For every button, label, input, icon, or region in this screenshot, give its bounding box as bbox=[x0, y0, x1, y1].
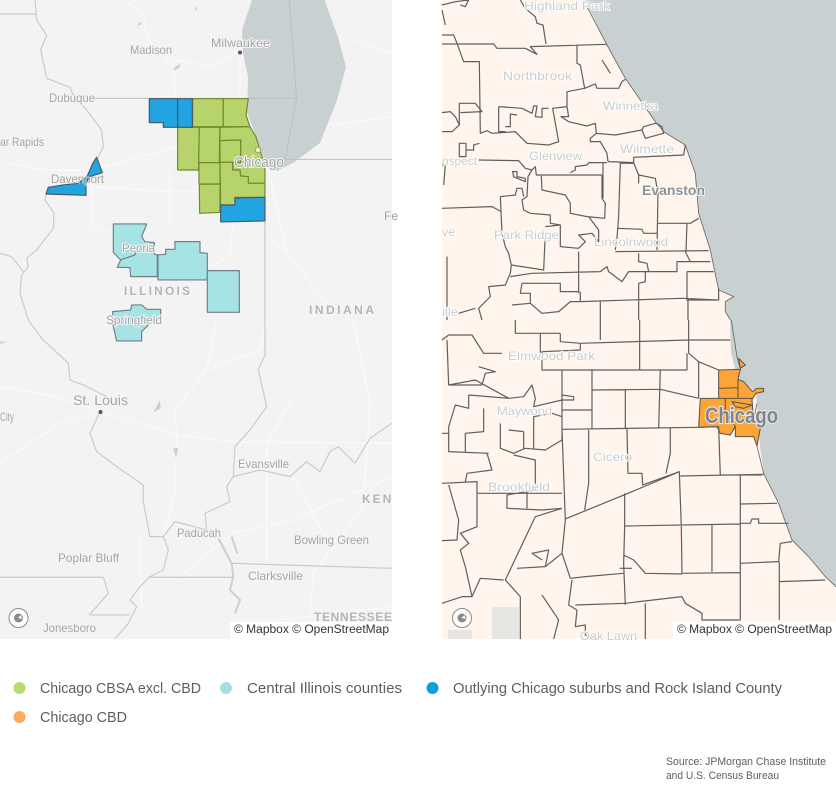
map labels: city: Northbrook bbox=[503, 69, 573, 83]
counties: outlying Chicago suburbs and Rock Island (blue) bbox=[46, 99, 265, 222]
map labels: regional: Peoria bbox=[122, 241, 155, 255]
attribution bbox=[230, 622, 392, 639]
tract boundaries north bbox=[442, 0, 734, 320]
tract boundaries south bbox=[442, 320, 836, 639]
legend bbox=[14, 681, 783, 726]
source note bbox=[666, 756, 826, 782]
map labels: city: ospect bbox=[442, 154, 478, 168]
map labels: city: Oak Lawn bbox=[580, 629, 637, 643]
counties: Chicago CBSA excl. CBD (green) bbox=[178, 99, 265, 213]
map labels: regional: Springfield bbox=[106, 313, 162, 327]
attribution: © Mapbox © OpenStreetMap bbox=[677, 624, 832, 636]
map labels: regional bbox=[0, 36, 398, 635]
map labels: city: ve bbox=[442, 225, 455, 239]
legend item: Chicago CBD: Chicago CBD bbox=[40, 710, 127, 726]
map labels: regional: KEN bbox=[362, 492, 393, 506]
map labels: regional: Paducah bbox=[177, 526, 221, 540]
source note: Source: JPMorgan Chase Institute bbox=[666, 756, 826, 768]
map labels: city: Cicero bbox=[593, 450, 632, 464]
map labels: regional: INDIANA bbox=[309, 303, 376, 317]
map labels: city: Elmwood Park bbox=[508, 349, 596, 363]
patches: excluded area bbox=[448, 607, 519, 639]
counties: Central Illinois (teal) bbox=[113, 224, 239, 341]
map labels: city bbox=[442, 0, 778, 643]
icon: Mapbox logo bbox=[9, 608, 28, 628]
map labels: regional: Evansville bbox=[238, 457, 289, 471]
legend item: Chicago CBSA excl. CBD: Chicago CBSA excl. CBD bbox=[40, 681, 201, 697]
map labels: city: Wilmette bbox=[620, 142, 674, 156]
map labels: city: Glenview bbox=[529, 149, 582, 163]
Chicago CBD tracts (orange) bbox=[699, 358, 764, 446]
map labels: regional: Madison bbox=[130, 43, 172, 57]
map labels: city: Evanston bbox=[642, 183, 705, 198]
map labels: regional: Davenport bbox=[51, 172, 105, 186]
water: lake bbox=[585, 0, 836, 587]
map labels: city: Chicago bbox=[705, 403, 778, 428]
attribution: © Mapbox © OpenStreetMap bbox=[234, 624, 389, 636]
map labels: city: Winnetka bbox=[603, 99, 658, 113]
map labels: regional: Poplar Bluff bbox=[58, 551, 120, 565]
map labels: regional: Milwaukee bbox=[211, 36, 270, 50]
map labels: regional: ar Rapids bbox=[0, 135, 44, 149]
map labels: regional: Chicago bbox=[234, 154, 284, 171]
legend item: Central Illinois counties: Central Illinois counties bbox=[247, 681, 402, 697]
map labels: regional: Clarksville bbox=[248, 569, 303, 583]
source note: and U.S. Census Bureau bbox=[666, 770, 779, 782]
icon: Mapbox logo bbox=[452, 608, 472, 628]
map labels: regional: Jonesboro bbox=[43, 621, 96, 635]
map labels: regional: ILLINOIS bbox=[124, 284, 192, 298]
water: Lake Michigan bbox=[242, 0, 346, 171]
map labels: regional: Fe bbox=[384, 209, 398, 223]
state boundaries and rivers bbox=[0, 0, 392, 639]
attribution bbox=[673, 622, 836, 639]
city markers bbox=[98, 50, 261, 414]
panel: Chicago city map bbox=[442, 0, 836, 643]
map labels: regional: City bbox=[0, 410, 14, 424]
legend item: Outlying Chicago suburbs and Rock Island County: Outlying Chicago suburbs and Rock Island County bbox=[453, 681, 783, 697]
map labels: city: Lincolnwood bbox=[594, 235, 668, 249]
map labels: city: Maywood bbox=[497, 404, 552, 418]
panel: regional map of Illinois bbox=[0, 0, 398, 639]
map labels: regional: Bowling Green bbox=[294, 533, 369, 547]
map labels: city: Brookfield bbox=[488, 480, 550, 494]
map labels: city: ille bbox=[442, 305, 458, 319]
map labels: regional: St. Louis bbox=[73, 392, 128, 408]
map labels: regional: Dubuque bbox=[49, 91, 95, 105]
map labels: city: Park Ridge bbox=[494, 228, 559, 242]
map labels: regional: TENNESSEE bbox=[314, 610, 394, 624]
